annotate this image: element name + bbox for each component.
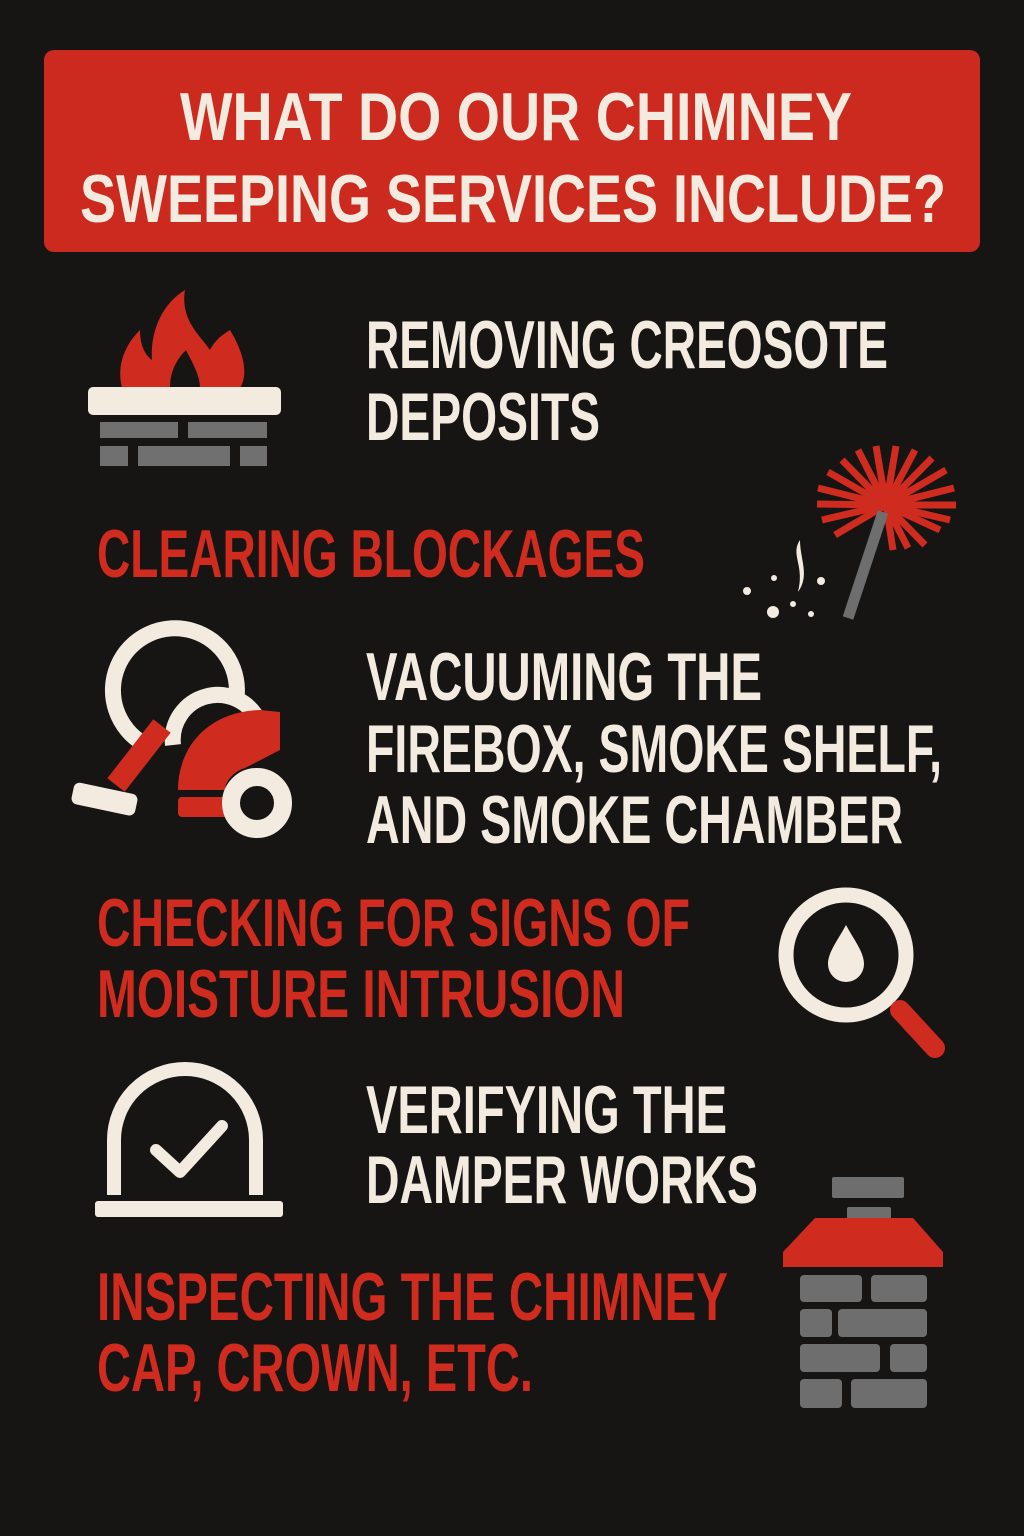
text: checking moisture: CHECKING FOR SIGNS OF [97,885,690,961]
text: verifying damper: DAMPER WORKS [366,1142,758,1218]
text: inspecting chimney cap [97,1259,728,1406]
text: clearing blockages: CLEARING BLOCKAGES [97,516,645,592]
icon: chimney [783,1177,943,1408]
text: removing creosote deposits: DEPOSITS [366,379,600,455]
text: inspecting chimney cap: CAP, CROWN, ETC. [97,1330,533,1406]
icon: vacuum [70,628,283,829]
icon: fireplace with flame [88,290,281,466]
text: checking moisture [97,885,690,1032]
text: inspecting chimney cap: INSPECTING THE CHIMNEY [97,1259,728,1335]
text: removing creosote deposits [366,307,888,455]
text: checking moisture: MOISTURE INTRUSION [97,956,625,1032]
title banner: WHAT DO OUR CHIMNEY [180,79,852,155]
text: verifying damper: VERIFYING THE [366,1072,727,1148]
icon: magnifier with drop [786,895,935,1048]
title banner [44,50,980,252]
text: verifying damper [366,1072,758,1218]
icon: damper arch with check [95,1069,283,1217]
text: vacuuming: VACUUMING THE [366,639,762,715]
icon: chimney brush [743,446,956,618]
text: vacuuming [366,639,942,858]
